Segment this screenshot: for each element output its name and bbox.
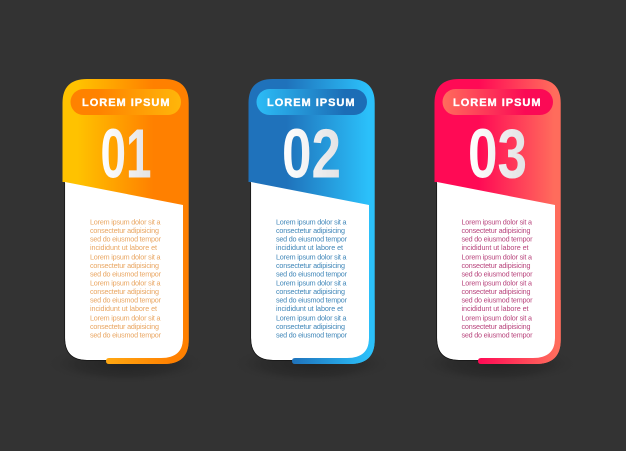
card 01 body text (90, 218, 162, 340)
panel: card 03 (416, 79, 580, 384)
card 03 body text: sed do eiusmod tempor (462, 270, 533, 278)
card 02 body text: Lorem ipsum dolor sit a (276, 314, 346, 322)
panel: card 02 (230, 79, 394, 384)
card 01 coloured body (62, 79, 189, 364)
card 01 body text: sed do eiusmod tempor (90, 270, 162, 278)
card 03 body text (462, 218, 533, 340)
card 03 bottom tab (478, 300, 561, 364)
card 02 body text: sed do eiusmod tempor (276, 234, 348, 244)
card 02 body text: sed do eiusmod tempor (276, 270, 348, 278)
card 02 body text: consectetur adipisicing (276, 261, 345, 270)
card 02 body text: consectetur adipisicing (276, 322, 345, 331)
card 02 body text: consectetur adipisicing (276, 226, 345, 235)
card 01 body text: Lorem ipsum dolor sit a (90, 278, 160, 288)
card 03 heading pill: LOREM IPSUM (453, 97, 540, 109)
card 01 body text: consectetur adipisicing (90, 226, 159, 235)
card 02 left edge line (251, 183, 293, 360)
card 03 body text: sed do eiusmod tempor (462, 234, 533, 244)
panel: card 01 (44, 79, 208, 384)
card 03 left edge line (437, 183, 479, 360)
card 03 body text: consectetur adipisicing (462, 287, 530, 296)
card 03 body text: Lorem ipsum dolor sit a (462, 252, 532, 262)
card 02 body text: Lorem ipsum dolor sit a (276, 252, 346, 262)
card 03 body text: sed do eiusmod tempor (462, 296, 533, 304)
card 01 white panel (65, 182, 183, 360)
card 01 body text: Lorem ipsum dolor sit a (90, 252, 160, 262)
card 01 body text: Lorem ipsum dolor sit a (90, 314, 160, 322)
card 01 body text: sed do eiusmod tempor (90, 296, 162, 304)
card 01 body text: sed do eiusmod tempor (90, 330, 162, 340)
card 01 number: 01 (100, 114, 152, 192)
card 02 body text: Lorem ipsum dolor sit a (276, 278, 346, 288)
card 01 bottom tab (106, 300, 189, 364)
card 02 body text: consectetur adipisicing (276, 287, 345, 296)
card 02 heading pill: LOREM IPSUM (267, 97, 354, 109)
card 01 shadow (44, 344, 208, 384)
card 01 body text: Lorem ipsum dolor sit a (90, 218, 160, 226)
card 03 body text: consectetur adipisicing (462, 261, 530, 270)
card 02 bottom tab (292, 300, 375, 364)
card 01 body text: consectetur adipisicing (90, 322, 159, 331)
card 02 body text: incididunt ut labore et (276, 304, 343, 313)
card 03 coloured body (434, 79, 561, 364)
card 02 number: 02 (282, 114, 341, 192)
card 03 body text: Lorem ipsum dolor sit a (462, 278, 532, 288)
card 03 body text: consectetur adipisicing (462, 322, 530, 331)
card 02 body text: sed do eiusmod tempor (276, 296, 348, 304)
card 03 number: 03 (468, 114, 527, 192)
card 02 body text: Lorem ipsum dolor sit a (276, 218, 346, 226)
card 01 body text: consectetur adipisicing (90, 261, 159, 270)
card 03 body text: Lorem ipsum dolor sit a (462, 314, 532, 322)
card 02 shadow (230, 344, 394, 384)
card 02 body text: incididunt ut labore et (276, 243, 343, 252)
card 01 heading pill (70, 89, 181, 115)
card 03 body text: incididunt ut labore et (462, 304, 528, 313)
card 02 heading pill (256, 89, 367, 115)
card 03 body text: Lorem ipsum dolor sit a (462, 218, 532, 226)
card 03 body text: sed do eiusmod tempor (462, 330, 533, 340)
card 01 body text: consectetur adipisicing (90, 287, 159, 296)
card 02 body text: sed do eiusmod tempor (276, 330, 348, 340)
card 02 white panel (251, 182, 369, 360)
card 03 heading pill (442, 89, 553, 115)
card 02 body text (276, 218, 348, 340)
card 01 left edge line (65, 183, 107, 360)
card 03 shadow (416, 344, 580, 384)
card 01 body text: sed do eiusmod tempor (90, 234, 162, 244)
card 03 body text: incididunt ut labore et (462, 243, 528, 252)
card 03 body text: consectetur adipisicing (462, 226, 530, 235)
card 02 coloured body (248, 79, 375, 364)
card 01 body text: incididunt ut labore et (90, 243, 157, 252)
card 03 white panel (437, 182, 555, 360)
card 01 body text: incididunt ut labore et (90, 304, 157, 313)
card 01 heading pill: LOREM IPSUM (82, 97, 170, 109)
